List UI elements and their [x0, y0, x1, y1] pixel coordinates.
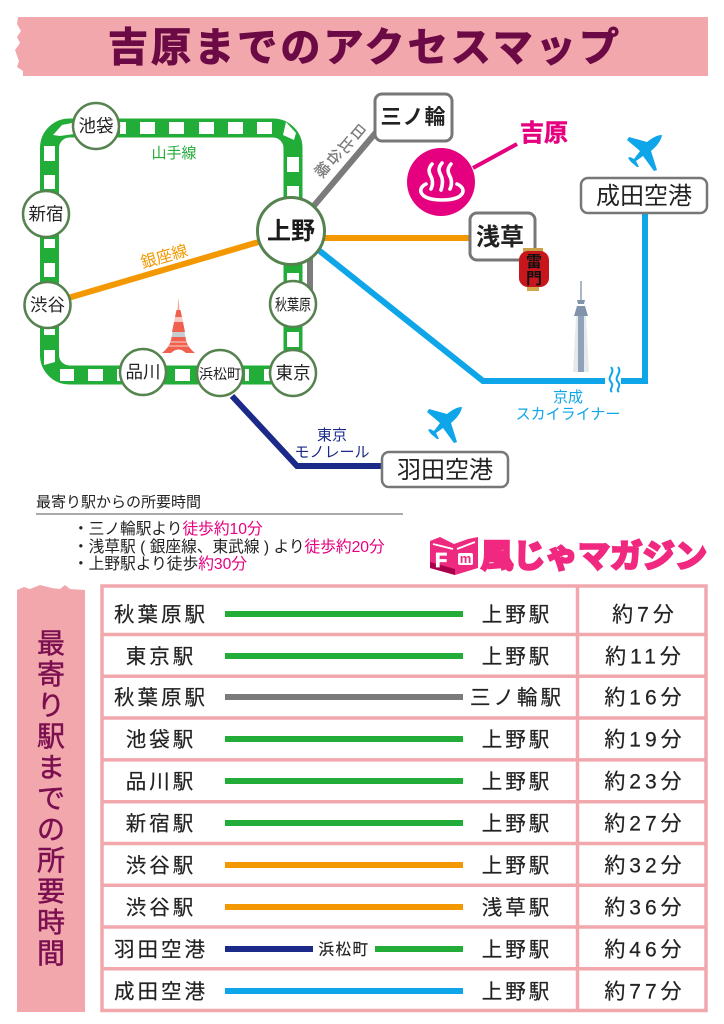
station box: Haneda Airport [382, 452, 508, 487]
Hibiya line and label: 谷 [322, 146, 345, 169]
row: Akihabara to Ueno: 秋葉原駅 [114, 604, 208, 626]
row: Ikebukuro to Ueno [126, 728, 686, 752]
note: Ueno: ・上野駅より徒歩約30分 [73, 555, 247, 573]
station: Shinagawa [120, 349, 166, 395]
row: Haneda to Ueno: 上野駅 [482, 938, 552, 962]
Ginza line and label: 銀座線 [139, 242, 190, 272]
icon: Kaminarimon lantern: 門 [526, 270, 542, 288]
logo: Fu-ja Magazine: m [460, 551, 471, 566]
icon: plane near Haneda [427, 407, 462, 443]
station box: Asakusa [470, 213, 535, 260]
row: Shibuya to Ueno [126, 854, 686, 878]
station: Ikebukuro: 池袋 [78, 116, 114, 136]
station box: Narita Airport [581, 178, 707, 213]
note: Minowa: ・三ノ輪駅より徒歩約10分 [73, 520, 263, 538]
logo: Fu-ja Magazine: 風じゃマガジン [481, 538, 707, 574]
station: Hamamatsucho [197, 350, 243, 396]
row: Akihabara to Minowa: 三ノ輪駅 [470, 686, 564, 710]
side banner: 時 [37, 907, 65, 938]
station: Ikebukuro [73, 103, 119, 149]
station box: Minowa: 三ノ輪 [380, 106, 446, 129]
station box: Haneda Airport: 羽田空港 [397, 457, 493, 484]
Yamanote line ring: 山手線 [151, 145, 197, 162]
side banner: の [37, 814, 65, 845]
row: Shinjuku to Ueno: 新宿駅 [126, 812, 196, 836]
station box: Minowa [375, 94, 452, 141]
row: Akihabara to Ueno [114, 604, 678, 626]
row: Shinjuku to Ueno: 上野駅 [482, 812, 552, 836]
row: Akihabara to Minowa: 約16分 [604, 686, 686, 710]
row: Ikebukuro to Ueno: 約19分 [604, 728, 686, 752]
travel time table [102, 586, 706, 1010]
row: Shibuya to Asakusa: 約36分 [604, 896, 686, 920]
side banner [17, 585, 85, 1012]
row: Haneda to Ueno: 羽田空港 [114, 938, 208, 962]
note: Asakusa: ・浅草駅 ( 銀座線、東武線 ) より徒歩約20分 [73, 538, 385, 556]
icon: Kaminarimon lantern [519, 248, 549, 291]
row: Shinjuku to Ueno: 約27分 [604, 812, 686, 836]
station box: Narita Airport: 成田空港 [596, 183, 692, 210]
side banner: で [37, 783, 65, 814]
Tokyo Monorail line and label: モノレール [294, 444, 370, 461]
Yoshiwara onsen marker [407, 120, 568, 216]
station: Hamamatsucho: 浜松町 [199, 366, 241, 382]
station: Shibuya: 渋谷 [30, 295, 65, 315]
row: Narita to Ueno: 約77分 [604, 980, 686, 1004]
Hibiya line and label: 日 [346, 121, 369, 144]
icon: Kaminarimon lantern: 雷 [526, 253, 542, 271]
route map [23, 94, 707, 487]
Hibiya line and label [310, 121, 378, 290]
Keisei Skyliner line and label: 京成 [553, 389, 583, 406]
row: Shibuya to Asakusa: 浅草駅 [482, 896, 552, 920]
side banner: 寄 [37, 659, 65, 690]
row: Shibuya to Ueno: 渋谷駅 [126, 854, 196, 878]
station box: Asakusa: 浅草 [476, 224, 524, 251]
Keisei Skyliner line and label [316, 212, 645, 423]
row: Tokyo to Ueno: 上野駅 [482, 646, 552, 668]
row: Shibuya to Ueno: 上野駅 [482, 854, 552, 878]
walking time notes [36, 494, 403, 573]
icon: Tokyo Tower [162, 297, 195, 353]
side banner: 間 [37, 938, 65, 969]
row: Haneda to Ueno [114, 938, 686, 962]
row: Shinagawa to Ueno [126, 770, 686, 794]
row: Narita to Ueno: 上野駅 [482, 980, 552, 1004]
row: Tokyo to Ueno [126, 646, 685, 668]
row: Akihabara to Ueno: 上野駅 [482, 604, 552, 626]
title banner: 吉原までのアクセスマップ [108, 26, 622, 70]
notes heading: 最寄り駅からの所要時間 [36, 494, 201, 511]
row: Haneda to Ueno: 浜松町 [318, 940, 370, 958]
Yamanote line ring [44, 122, 299, 381]
row: Ikebukuro to Ueno: 上野駅 [482, 728, 552, 752]
side banner: 駅 [37, 721, 65, 752]
Hibiya line and label: 比 [334, 134, 357, 157]
station: Ueno [258, 198, 324, 264]
station: Shibuya [24, 282, 70, 328]
row: Akihabara to Ueno: 約7分 [612, 604, 678, 626]
row: Shibuya to Asakusa [126, 896, 686, 920]
row: Akihabara to Minowa: 秋葉原駅 [114, 686, 208, 710]
side banner: り [37, 690, 65, 721]
row: Tokyo to Ueno: 約11分 [605, 646, 685, 668]
row: Narita to Ueno [114, 980, 686, 1004]
station: Shinjuku [23, 191, 69, 237]
row: Narita to Ueno: 成田空港 [114, 980, 208, 1004]
row: Akihabara to Minowa [114, 686, 686, 710]
row: Shinjuku to Ueno [126, 812, 686, 836]
icon: plane near Narita [627, 135, 662, 171]
row: Shibuya to Asakusa: 渋谷駅 [126, 896, 196, 920]
Tokyo Monorail line and label [232, 396, 384, 466]
side banner: ま [37, 752, 65, 783]
table grid [102, 586, 706, 1010]
icon: Tokyo Skytree [573, 281, 589, 372]
station: Akihabara [270, 281, 316, 327]
Hibiya line and label: 線 [310, 159, 333, 182]
row: Shibuya to Ueno: 約32分 [604, 854, 686, 878]
side banner: 所 [37, 845, 65, 876]
side banner: 最 [37, 628, 65, 659]
title banner [15, 17, 708, 76]
station: Shinagawa: 品川 [126, 362, 160, 382]
station: Tokyo [270, 350, 316, 396]
Keisei Skyliner line and label: スカイライナー [516, 406, 620, 423]
Tokyo Monorail line and label: 東京 [317, 427, 347, 444]
row: Ikebukuro to Ueno: 池袋駅 [126, 728, 196, 752]
Ginza line and label [68, 238, 472, 298]
station: Ueno: 上野 [267, 218, 315, 245]
station: Tokyo: 東京 [276, 363, 310, 383]
row: Tokyo to Ueno: 東京駅 [126, 646, 196, 668]
station: Shinjuku: 新宿 [28, 204, 64, 224]
row: Shinagawa to Ueno: 品川駅 [126, 770, 196, 794]
row: Shinagawa to Ueno: 上野駅 [482, 770, 552, 794]
logo: Fu-ja Magazine: F [435, 550, 447, 572]
row: Haneda to Ueno: 約46分 [604, 938, 686, 962]
Yoshiwara onsen marker: 吉原 [520, 120, 568, 147]
station: Akihabara: 秋葉原 [275, 296, 311, 314]
row: Shinagawa to Ueno: 約23分 [604, 770, 686, 794]
side banner: 要 [37, 876, 65, 907]
